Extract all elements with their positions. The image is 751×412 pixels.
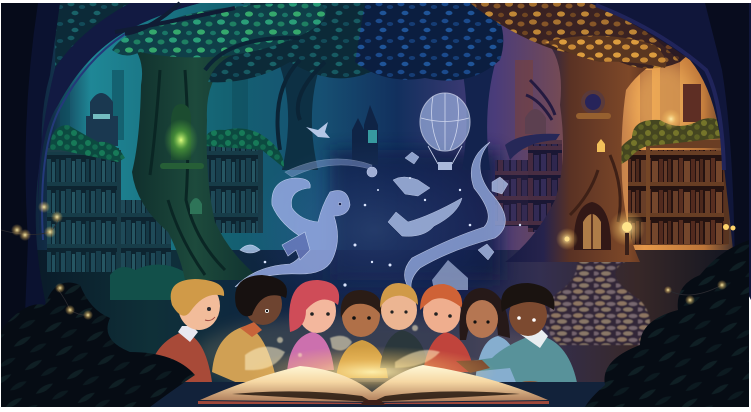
far observatory right — [525, 109, 546, 134]
foreground foliage left — [1, 282, 195, 407]
bookshelf: purple — [495, 140, 562, 232]
far tower left — [86, 93, 118, 146]
moss on shelves — [50, 118, 722, 168]
spirit hot air balloon — [420, 93, 470, 170]
warm lamps and fireflies — [556, 109, 736, 255]
child 5: blond boy in dark sweater — [380, 283, 428, 368]
bushes behind the children — [110, 264, 190, 300]
cobblestone path — [544, 249, 650, 345]
canopy: dark teal — [208, 3, 375, 82]
left tree trunk — [128, 40, 262, 280]
spirit creatures — [388, 152, 508, 260]
child 1: blond boy in red sweater — [148, 279, 224, 382]
canopy: bright orange fringe — [545, 36, 666, 68]
child 7: girl in light blue — [459, 288, 522, 384]
magic glow behind spirits — [245, 140, 505, 320]
bookshelf: teal centre — [205, 143, 263, 233]
spirit dragon — [235, 159, 377, 287]
magic swirls rising from the book — [245, 325, 440, 370]
spirit fairy — [306, 122, 330, 138]
canopy: blue — [355, 3, 503, 81]
children back glow — [195, 313, 555, 397]
far tower orange — [683, 84, 701, 122]
canopy: teal upper left — [55, 3, 200, 68]
fairy string lights — [1, 201, 727, 320]
spirit ribbon and cottage — [404, 142, 505, 292]
child 6: red-haired child in red — [420, 284, 474, 372]
child 4: boy in gold sweater — [336, 290, 388, 378]
canopy: brown upper right — [600, 3, 722, 62]
right framing tree and branches — [526, 3, 751, 300]
bookshelf: teal lower — [121, 200, 171, 275]
table — [130, 382, 620, 407]
child 3: girl in pink — [287, 280, 339, 372]
bookshelf: teal left — [47, 148, 121, 272]
canopy: green — [112, 3, 326, 57]
child 8: boy in teal sweater pointing — [456, 283, 578, 392]
sparkles — [264, 177, 521, 287]
right tree trunk — [505, 40, 660, 262]
child 2: boy in yellow sweater — [212, 275, 287, 384]
left framing tree and branches — [1, 3, 325, 360]
canopy: orange — [470, 3, 680, 68]
open glowing book — [198, 346, 549, 405]
bookshelf: warm brown — [628, 140, 729, 245]
foreground foliage right — [585, 240, 749, 407]
